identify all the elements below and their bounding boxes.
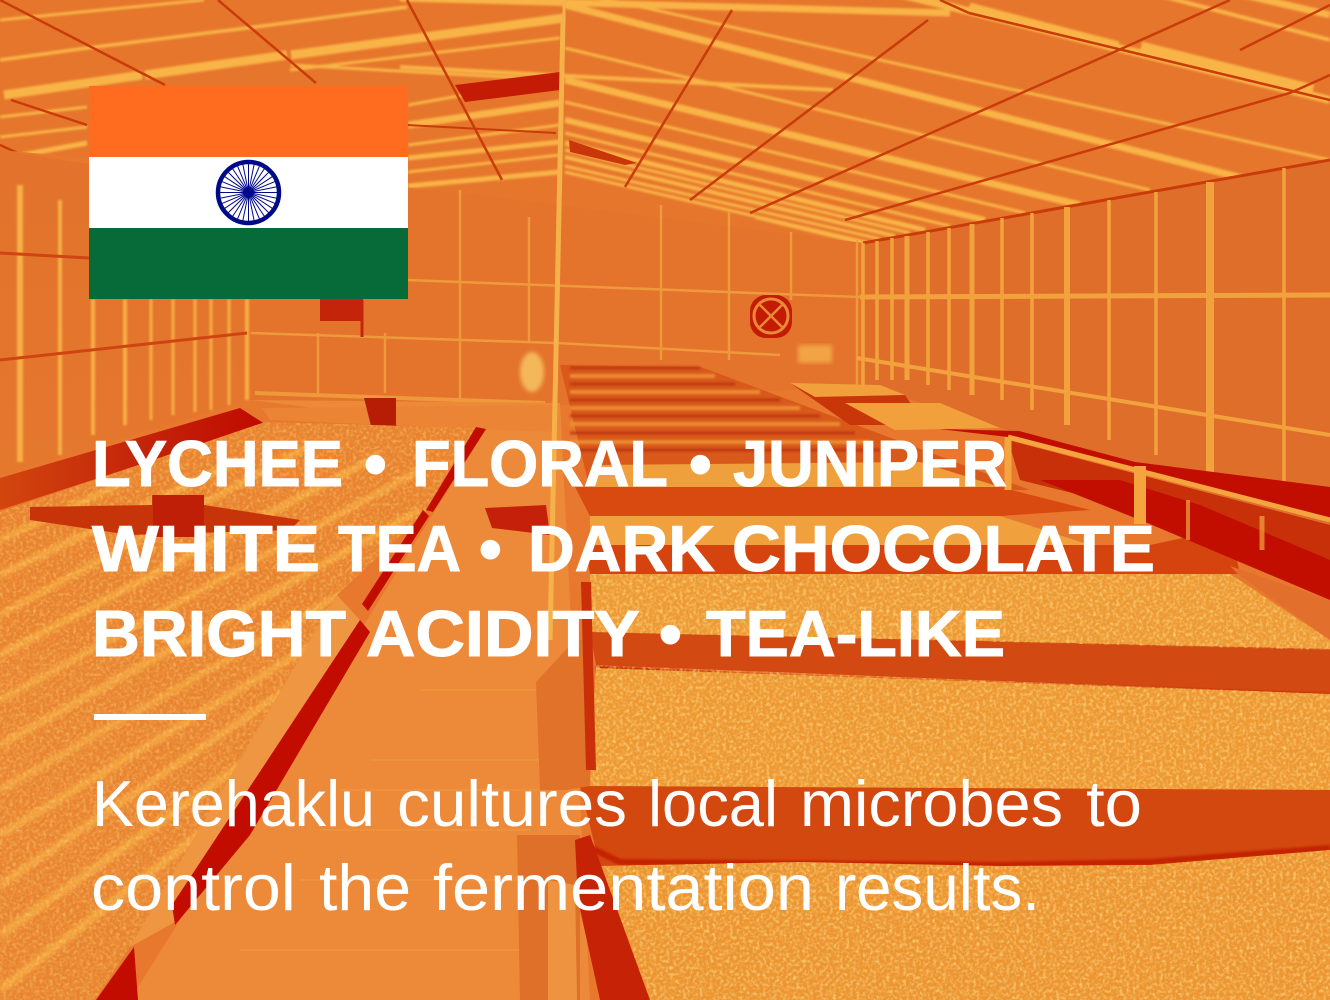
heading: flavour notes: •: [659, 597, 682, 670]
small dark box on floor: [364, 398, 410, 430]
description text: cultures: [397, 767, 627, 840]
description text: results.: [835, 851, 1040, 924]
ceiling: [0, 0, 1330, 250]
description text: the: [319, 851, 411, 924]
far benches right: [790, 383, 1000, 430]
heading: flavour notes: FLORAL: [412, 427, 668, 500]
heading: flavour notes: DARK: [528, 512, 715, 585]
left frame of right beds: [517, 0, 650, 1000]
floor: [130, 400, 590, 1000]
heading: flavour notes: [92, 427, 1155, 670]
description text: fermentation: [433, 851, 814, 924]
dark groove beside left bed: [96, 427, 486, 1000]
description text: local: [648, 767, 778, 840]
right wall: [857, 160, 1330, 530]
ceiling rafters: [0, 0, 1330, 220]
heading: flavour notes: JUNIPER: [733, 427, 1007, 500]
heading: flavour notes: •: [479, 512, 502, 585]
description text: microbes: [800, 767, 1063, 840]
description text: [91, 767, 1142, 924]
flag of India: [89, 86, 408, 299]
heading: flavour notes: LYCHEE: [92, 427, 343, 500]
bed side strip: [130, 595, 360, 947]
left wall: [0, 150, 265, 510]
pale patches on end wall: [520, 352, 544, 392]
description text: to: [1086, 767, 1142, 840]
heading: flavour notes: BRIGHT: [92, 597, 346, 670]
heading: flavour notes: CHOCOLATE: [732, 512, 1155, 585]
right wall of bed and rails: [939, 429, 1330, 640]
description text: Kerehaklu: [92, 767, 375, 840]
right coffee beds: [580, 570, 1330, 1000]
heading: flavour notes: •: [689, 427, 712, 500]
left coffee bed: [0, 410, 490, 1000]
heading: flavour notes: ACIDITY: [366, 597, 640, 670]
heading: flavour notes: TEA: [338, 512, 461, 585]
end wall: [250, 190, 863, 405]
heading: flavour notes: •: [364, 427, 387, 500]
icon: Ashoka Chakra wheel: [218, 162, 279, 223]
back rows of beds: [560, 365, 1240, 574]
ceiling glow strips: [0, 0, 1330, 243]
heading: flavour notes: WHITE: [92, 512, 320, 585]
heading: flavour notes: TEA-LIKE: [706, 597, 1005, 670]
icon: wall fans: [320, 295, 792, 338]
description text: control: [91, 851, 296, 924]
divider rule: [94, 714, 206, 720]
